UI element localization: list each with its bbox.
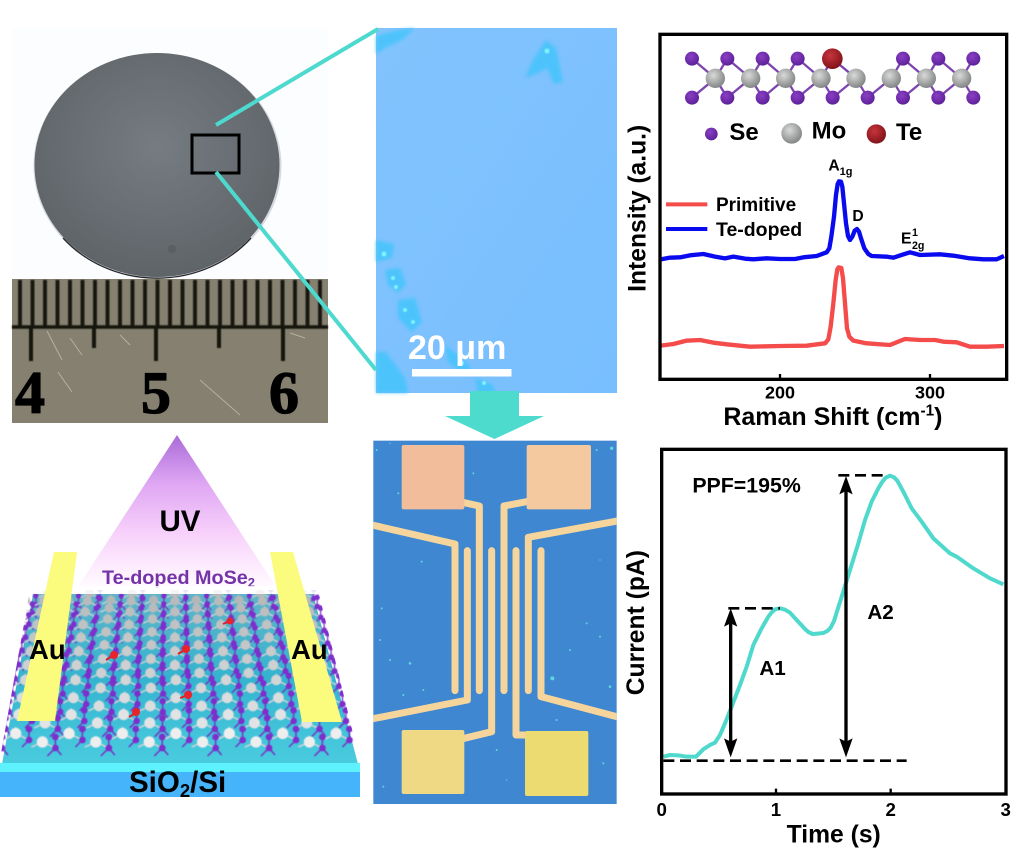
left Au electrode [17, 552, 77, 721]
x axis title: ) [934, 403, 942, 431]
panel: wafer photograph on ruler [12, 28, 328, 426]
Primitive line [666, 198, 707, 210]
peak label A1g: A [828, 158, 840, 175]
scale bar label: 20 μm [408, 329, 506, 367]
Mo swatch [781, 123, 802, 144]
selection box on wafer [192, 135, 239, 173]
baseline dashes [663, 757, 907, 765]
bonds [692, 59, 973, 98]
speckles [376, 443, 613, 788]
Te-doped label: Te-doped [716, 219, 802, 241]
peak label A1g: 1g [840, 166, 852, 178]
A2 bottom head [839, 738, 853, 757]
UV light cone [72, 435, 282, 596]
A1 shaft [726, 620, 736, 747]
x tick label 200: 200 [765, 382, 795, 402]
electrode traces [363, 502, 627, 738]
current trace [663, 476, 1003, 757]
y axis title: Intensity (a.u.) [624, 125, 651, 292]
arrow A1 [724, 608, 737, 757]
material label: 2 [248, 575, 255, 590]
molecular structure inset [685, 48, 980, 105]
x tick label 1: 1 [771, 799, 781, 820]
panel: fabricated device micrograph [363, 441, 627, 804]
x tick label 3: 3 [1000, 799, 1011, 820]
right Au label: Au [291, 634, 328, 665]
contact pad bottom left [402, 730, 464, 794]
A1 bottom head [724, 738, 737, 757]
photo background [12, 28, 328, 280]
arrow A2 [839, 476, 853, 757]
axes frame [662, 449, 1006, 794]
x tick label 0: 0 [656, 799, 667, 820]
bright flake spots [382, 48, 550, 385]
E superscript: 1 [912, 227, 918, 239]
A2 top head [839, 476, 853, 494]
Te atom [822, 48, 843, 69]
wafer flat mark [168, 245, 176, 253]
device background [373, 441, 617, 804]
x tick label 300: 300 [915, 382, 945, 402]
UV label: UV [160, 505, 201, 538]
right Au electrode [270, 552, 342, 722]
substrate label: SiO [129, 766, 180, 799]
atom legend [705, 117, 922, 146]
ruler numeral 5: 5 [141, 360, 171, 426]
contact pad top left [402, 445, 464, 509]
Primitive label: Primitive [716, 195, 796, 216]
A2 peak dashes [838, 471, 887, 479]
Te label: Te [896, 119, 922, 146]
A2 shaft [841, 487, 851, 747]
contact pad top right [527, 445, 591, 509]
white haze at lattice top [33, 586, 318, 594]
contact pad bottom right [525, 731, 588, 796]
x axis title: Time (s) [787, 821, 881, 848]
ruler body [12, 279, 328, 423]
A1 label: A1 [759, 657, 786, 680]
substrate label: /Si [190, 766, 226, 799]
wafer disc [34, 53, 280, 277]
Se atoms [685, 52, 980, 105]
substrate top surface [2, 594, 358, 764]
material label: Te-doped MoSe [102, 567, 248, 589]
ruler numeral 4: 4 [15, 360, 45, 426]
chart: Raman spectra [624, 34, 1007, 431]
ruler ticks [12, 280, 328, 361]
y axis title: Current (pA) [623, 550, 650, 695]
wafer bottom dark edge [63, 238, 251, 278]
substrate label: 2 [180, 780, 190, 801]
Mo atoms [706, 69, 971, 88]
x ticks [776, 789, 891, 794]
Te-doped line [666, 223, 707, 235]
A1 top head [724, 608, 737, 627]
panel: device schematic [0, 435, 360, 801]
wafer rim [34, 54, 282, 278]
x axis title: Raman Shift (cm [723, 403, 920, 431]
legend: Primitive [666, 195, 796, 216]
A1 peak dashes [728, 604, 780, 612]
zoom guide line upper [216, 29, 378, 125]
substrate front face [0, 772, 360, 797]
Se swatch [705, 128, 718, 140]
arrow: micrograph to device [445, 391, 544, 439]
scale bar [412, 369, 512, 376]
panel: optical micrograph [376, 28, 617, 393]
x ticks [780, 374, 930, 379]
x tick label 2: 2 [885, 799, 896, 820]
peak label E12g [901, 227, 924, 252]
Te dopant atoms [106, 618, 234, 717]
left Au label: Au [29, 634, 66, 665]
ruler numeral 6: 6 [269, 360, 299, 426]
atomic lattice [0, 587, 353, 756]
ruler scratches [47, 331, 305, 415]
Se label: Se [729, 119, 759, 146]
zoom guide line lower [216, 172, 376, 370]
series: Primitive [661, 267, 1004, 347]
E subscript: 2g [912, 240, 924, 252]
Mo label: Mo [812, 117, 846, 144]
substrate top edge [0, 763, 360, 772]
micrograph background [376, 28, 617, 393]
E letter: E [901, 231, 911, 248]
series: Te-doped [661, 181, 1004, 259]
flakes [376, 28, 563, 393]
A2 label: A2 [867, 601, 894, 624]
x axis title: -1 [920, 402, 935, 419]
legend: Te-doped [666, 219, 802, 241]
axes frame [660, 34, 1007, 379]
Te swatch [867, 124, 886, 144]
ruler [12, 279, 328, 426]
chart: paired pulse current [623, 449, 1011, 848]
peak label D: D [852, 208, 864, 225]
PPF value: PPF=195% [692, 474, 801, 498]
